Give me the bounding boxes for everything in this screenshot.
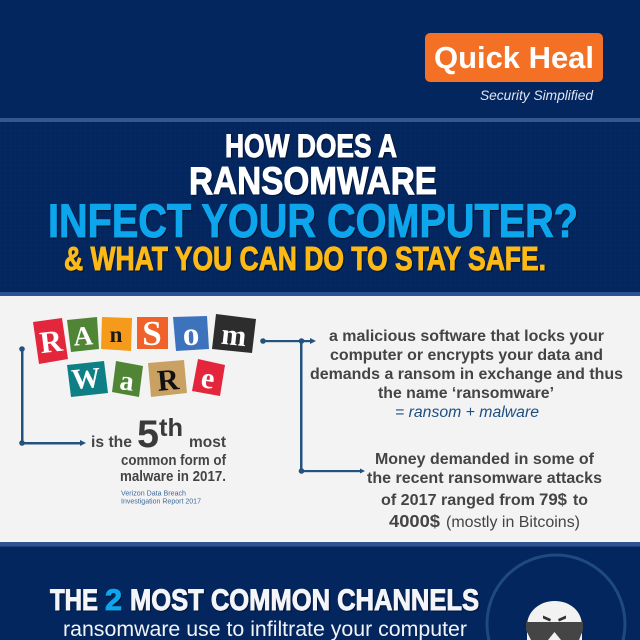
text: ransomware definition: a malicious software that locks your (329, 328, 604, 345)
text: ransom amounts: (mostly in Bitcoins) (446, 514, 580, 531)
ransom-note letters: a (118, 365, 136, 398)
arrow: letters to fifth-most statistic (19, 346, 86, 446)
arrow: letters to definitions (260, 338, 365, 474)
source note: Investigation Report 2017 (121, 498, 201, 506)
text: ransomware definition: = ransom + malware (395, 404, 539, 421)
statistic: 5th most common: malware in 2017. (120, 469, 226, 485)
text: ransom amounts: Money demanded in some of (375, 451, 595, 468)
ransom-note letters: o (182, 317, 200, 353)
statistic: 5th most common: most (189, 434, 226, 451)
statistic: 5th most common: is the (91, 434, 132, 451)
tagline: Security Simplified (480, 87, 594, 103)
text: ransom amounts: to (573, 492, 588, 509)
title: RANSOMWARE (189, 160, 437, 203)
text: ransom amounts: the recent ransomware attacks (367, 470, 602, 487)
text: ransomware definition: the name ‘ransomware’ (378, 385, 554, 402)
statistic: 5th most common (91, 413, 226, 485)
panel: ransomware definition (0, 296, 640, 543)
ransom-note letters: S (142, 314, 162, 353)
ransom-note letters (33, 314, 256, 398)
heading: MOST COMMON CHANNELS (130, 584, 479, 617)
title (48, 128, 578, 278)
ransom-note letters: R (156, 363, 181, 398)
heading: THE (50, 584, 98, 617)
panel: logo header (425, 33, 603, 103)
ransom-note letters: W (70, 362, 102, 396)
text: ransom amounts: of 2017 ranged from (381, 492, 535, 509)
text: ransom amounts: 4000$ (389, 511, 440, 531)
source note: Verizon Data Breach (121, 490, 186, 498)
logo: Quick Heal (425, 33, 603, 82)
text: ransom amounts (367, 451, 602, 531)
statistic: 5th most common: 5 (137, 413, 159, 456)
ransom-note letters: A (72, 320, 94, 352)
ransom-note letters: R (38, 323, 65, 360)
icon: hacker in circle (487, 555, 625, 640)
text: ransomware definition: demands a ransom in exchange and thus (310, 366, 623, 383)
title: HOW DOES A (225, 128, 397, 164)
text: ransomware definition (310, 328, 623, 421)
text: ransomware definition: computer or encrypts your data and (330, 347, 603, 364)
source note (121, 490, 201, 506)
heading: 2 (105, 584, 122, 617)
statistic: 5th most common: common form of (121, 453, 226, 469)
ransom-note letters: e (199, 361, 217, 396)
panel: common channels (0, 542, 640, 640)
statistic: 5th most common: th (159, 414, 183, 442)
ransom-note letters: n (110, 322, 123, 347)
text: ransom amounts: 79$ (539, 490, 568, 509)
logo: Quick Heal: Quick Heal (434, 40, 594, 75)
panel: title band (0, 118, 640, 296)
ransom-note letters: m (220, 318, 248, 353)
